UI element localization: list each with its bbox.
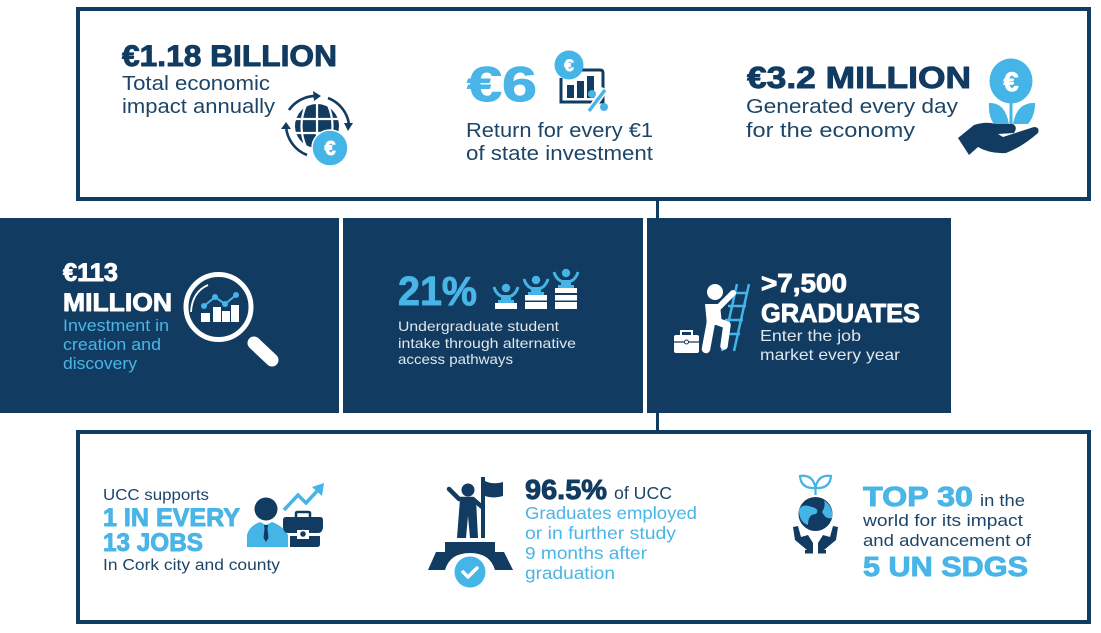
icon: businessperson, briefcase and arrow [247,483,324,547]
stat: 3.2 million [746,58,1038,155]
heading: top 30: TOP 30 [863,481,973,512]
text: cork city and county: In Cork city and county [103,557,280,574]
text: investment in creation: Investment in [63,317,169,335]
heading: 1 in every 13 jobs: 13 JOBS [103,529,203,557]
icon: person with flag on summit [428,477,513,588]
panel: graduates [647,218,951,413]
text: graduates employed: 9 months after [525,543,647,563]
heading: 3.2 million: €3.2 MILLION [747,61,971,95]
text: graduates employed: Graduates employed [525,503,697,523]
stat: 96.5 percent employed [428,474,697,588]
text: graduates employed: or in further study [525,523,676,543]
heading: 96.5 percent: 96.5% [525,474,607,505]
text: total economic impact: Total economic [122,72,270,95]
text: in the world for its impact: and advancement of [863,532,1031,550]
text: in the world for its impact: world for its impact [862,512,1023,530]
icon: chart with coin and percent: € [564,56,574,75]
text: enter job market: market every year [760,347,901,364]
stat: 1.18 billion [122,40,353,166]
heading: 1.18 billion: €1.18 BILLION [122,40,337,73]
text: investment in creation: discovery [63,355,138,373]
icon: magnifying glass with chart [186,274,272,360]
text: ucc supports: UCC supports [103,487,209,504]
text: graduates employed: graduation [525,563,615,583]
heading: 7500 graduates: GRADUATES [761,298,920,328]
heading: 7500 graduates: >7,500 [761,268,847,298]
icon: hand holding euro flower: € [1003,67,1019,97]
text: generated every day: Generated every day [746,95,959,118]
text: investment in creation: creation and [63,336,161,354]
text: total economic impact: impact annually [122,95,276,118]
text: in the world for its impact: in the [980,492,1025,510]
heading: 6 euro: €6 [467,58,537,112]
panel: research investment [0,218,339,413]
icon: earth with plant and hands [793,476,838,554]
heading: 1 in every 13 jobs: 1 IN EVERY [103,504,240,532]
text: generated every day: for the economy [746,119,916,142]
text: undergraduate intake: Undergraduate student [398,318,559,334]
text: undergraduate intake: intake through alternative [398,335,576,351]
stat: top 30 sdgs [793,476,1031,582]
text: of ucc: of UCC [614,483,672,503]
panel: bottom employment and impact [78,432,1089,622]
icon: chart with coin and percent [554,50,608,112]
stat: 1 in every 13 jobs [103,483,324,574]
text: undergraduate intake: access pathways [398,351,513,367]
heading: 21 percent: 21% [398,268,477,314]
panel: alternative access [343,218,643,413]
icon: hand holding euro flower [958,58,1038,155]
heading: 5 un sdgs: 5 UN SDGS [863,551,1028,582]
icon: globe with euro [281,91,353,166]
heading: 113 million: €113 [63,259,118,287]
text: enter job market: Enter the job [760,328,861,345]
heading: 113 million: MILLION [63,289,172,317]
stat: 6 euro return [466,50,653,165]
icon: people on podium steps [494,269,578,309]
text: return for every euro: of state investment [466,143,653,165]
text: return for every euro: Return for every €1 [466,120,653,142]
icon: globe with euro: € [324,138,336,160]
icon: climber on ladder with briefcase [674,284,749,353]
